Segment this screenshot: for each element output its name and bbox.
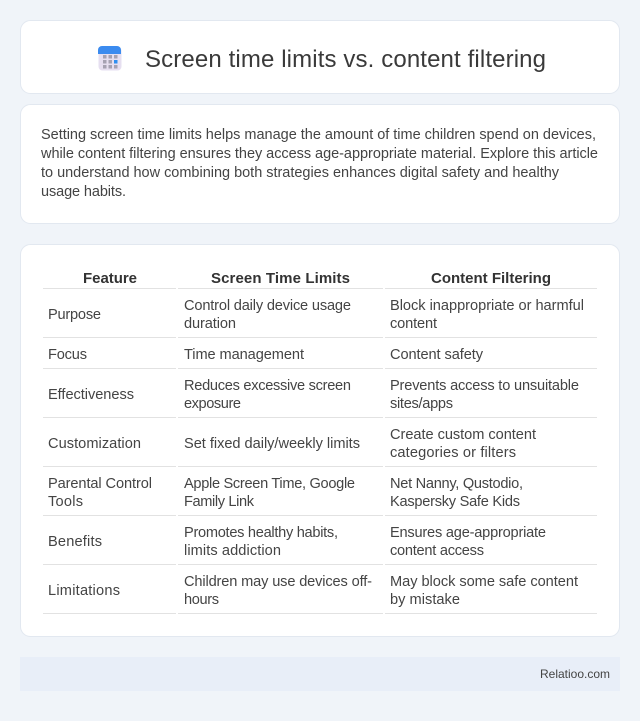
row: effectiveness: sites/apps [390, 396, 453, 412]
panel: comparison table [20, 244, 620, 636]
text block: intro paragraph: Setting screen time limits helps manage the amount of time children spend on devices, [41, 127, 596, 143]
row: benefits [48, 525, 546, 559]
row: benefits: limits addiction [184, 543, 281, 559]
row: purpose [48, 298, 584, 332]
row: purpose: Control daily device usage [184, 298, 351, 314]
row: limitations: Limitations [48, 583, 120, 599]
row: limitations: by mistake [390, 592, 460, 608]
table header: Content Filtering [431, 270, 551, 287]
row: purpose: content [390, 316, 437, 332]
row: effectiveness: exposure [184, 396, 241, 412]
row: effectiveness: Reduces excessive screen [184, 378, 351, 394]
table header: Screen Time Limits [211, 270, 350, 287]
row: limitations: Children may use devices off- [184, 574, 372, 590]
row: parental control tools: Family Link [184, 494, 255, 510]
row: focus: Content safety [390, 347, 484, 363]
row: limitations: May block some safe content [390, 574, 578, 590]
row: benefits: Promotes healthy habits, [184, 525, 338, 541]
row: customization: Customization [48, 436, 141, 452]
row: effectiveness [48, 378, 579, 412]
text block: intro paragraph: while content filtering ensures they access age-appropriate material. Explore this article [40, 146, 598, 162]
row: effectiveness: Prevents access to unsuitable [390, 378, 579, 394]
text block: intro paragraph: to understand how combining both strategies enhances digital safety and healthy [41, 165, 560, 181]
row: focus: Focus [48, 347, 87, 363]
row: parental control tools: Net Nanny, Qustodio, [390, 476, 523, 492]
row: parental control tools: Tools [48, 494, 83, 510]
row: purpose: duration [184, 316, 236, 332]
row: parental control tools: Kaspersky Safe Kids [390, 494, 520, 510]
row: parental control tools [48, 476, 523, 510]
icon: calendar [98, 46, 122, 70]
panel: introduction [20, 104, 620, 224]
footer [20, 657, 620, 691]
row: customization [48, 427, 536, 461]
row: focus: Time management [184, 347, 304, 363]
title: Screen time limits vs. content filtering [145, 46, 546, 73]
row: limitations [48, 574, 578, 608]
row: effectiveness: Effectiveness [48, 387, 134, 403]
panel: title card [20, 20, 620, 94]
row: customization: categories or filters [390, 445, 516, 461]
row: benefits: Benefits [48, 534, 102, 550]
row: benefits: Ensures age-appropriate [390, 525, 546, 541]
row: benefits: content access [390, 543, 484, 559]
row: customization: Create custom content [390, 427, 536, 443]
row: customization: Set fixed daily/weekly limits [184, 436, 360, 452]
row: parental control tools: Apple Screen Time, Google [184, 476, 355, 492]
row: focus [48, 347, 484, 363]
row: limitations: hours [184, 592, 219, 608]
row: parental control tools: Parental Control [48, 476, 152, 492]
text block: intro paragraph [40, 127, 598, 200]
footer brand: Relatioo.com [540, 667, 610, 681]
row: purpose: Purpose [48, 307, 101, 323]
row: purpose: Block inappropriate or harmful [390, 298, 584, 314]
table header: Feature [83, 270, 137, 287]
table header [83, 270, 551, 287]
text block: intro paragraph: usage habits. [41, 184, 126, 200]
